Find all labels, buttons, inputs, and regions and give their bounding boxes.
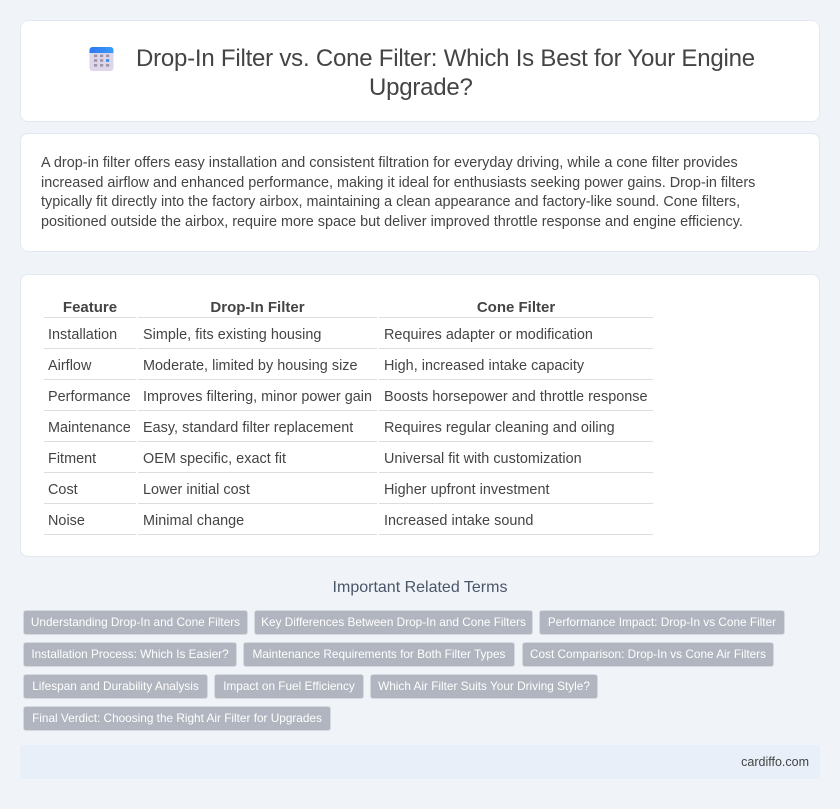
- row: maintenance: Requires regular cleaning and oiling: [384, 420, 615, 436]
- row: installation: Simple, fits existing housing: [143, 327, 321, 343]
- heading: related terms: Important Related Terms: [333, 579, 507, 596]
- tag: Final Verdict: Choosing the Right Air Filter for Upgrades: [32, 711, 322, 725]
- table header: Drop-In Filter: [210, 299, 305, 316]
- related term tags: [23, 610, 785, 731]
- tag: Key Differences Between Drop-In and Cone Filters: [261, 615, 526, 629]
- header card: [20, 20, 820, 122]
- row: performance: Improves filtering, minor power gain: [143, 389, 372, 405]
- row: installation: Installation: [48, 327, 117, 343]
- row: installation: [44, 327, 653, 349]
- table header: Cone Filter: [477, 299, 555, 316]
- footer credit: cardiffo.com: [741, 755, 809, 769]
- tag: Lifespan and Durability Analysis: [32, 679, 199, 693]
- row: noise: Noise: [48, 513, 85, 529]
- intro text: positioned outside the airbox, require more space but deliver improved throttle response and engine efficiency.: [41, 214, 743, 230]
- row: fitment: Fitment: [48, 451, 96, 467]
- tag: Cost Comparison: Drop-In vs Cone Air Filters: [530, 647, 766, 661]
- row: airflow: [44, 358, 653, 380]
- tag: [214, 674, 364, 699]
- tag: [23, 674, 208, 699]
- row: cost: Higher upfront investment: [384, 482, 550, 498]
- row: noise: [44, 513, 653, 535]
- tag: Installation Process: Which Is Easier?: [31, 647, 229, 661]
- row: fitment: OEM specific, exact fit: [143, 451, 286, 467]
- row: performance: Performance: [48, 389, 131, 405]
- row: fitment: [44, 451, 653, 473]
- comparison table: [44, 299, 653, 318]
- table header: Feature: [63, 299, 117, 316]
- tag: [243, 642, 515, 667]
- intro text: A drop-in filter offers easy installation and consistent filtration for everyday driving, while a cone filter provides: [41, 155, 738, 171]
- footer: [20, 745, 820, 779]
- tag: [254, 610, 533, 635]
- tag: [522, 642, 774, 667]
- row: performance: Boosts horsepower and throttle response: [384, 389, 648, 405]
- title: Drop-In Filter vs. Cone Filter: Which Is Best for Your Engine: [136, 45, 755, 72]
- title: [136, 45, 755, 101]
- row: airflow: High, increased intake capacity: [384, 358, 584, 374]
- row: performance: [44, 389, 653, 411]
- table header: [44, 299, 653, 318]
- tag: [370, 674, 598, 699]
- row: noise: Minimal change: [143, 513, 244, 529]
- row: airflow: Airflow: [48, 358, 91, 374]
- row: noise: Increased intake sound: [384, 513, 533, 529]
- row: fitment: Universal fit with customization: [384, 451, 582, 467]
- panel: introduction: [20, 133, 820, 252]
- row: cost: [44, 482, 653, 504]
- row: airflow: Moderate, limited by housing size: [143, 358, 358, 374]
- row: cost: Cost: [48, 482, 78, 498]
- tag: Maintenance Requirements for Both Filter Types: [253, 647, 505, 661]
- tag: Which Air Filter Suits Your Driving Style?: [378, 679, 590, 693]
- tag: Performance Impact: Drop-In vs Cone Filter: [548, 615, 776, 629]
- tag: Understanding Drop-In and Cone Filters: [31, 615, 240, 629]
- row: maintenance: [44, 420, 653, 442]
- intro text: increased airflow and enhanced performance, making it ideal for enthusiasts seeking power gains. Drop-in filters: [41, 175, 755, 191]
- row: installation: Requires adapter or modification: [384, 327, 593, 343]
- tag: [23, 706, 331, 731]
- row: maintenance: Maintenance: [48, 420, 131, 436]
- tag: [23, 610, 248, 635]
- icon: calendar: [90, 47, 114, 71]
- tag: [23, 642, 237, 667]
- title: Upgrade?: [369, 74, 473, 101]
- intro text: typically fit directly into the factory airbox, maintaining a clean appearance and factory-like sound. Cone filters,: [41, 194, 740, 210]
- intro text: [41, 155, 755, 230]
- panel: comparison table: [20, 274, 820, 557]
- row: maintenance: Easy, standard filter replacement: [143, 420, 353, 436]
- row: cost: Lower initial cost: [143, 482, 250, 498]
- tag: [539, 610, 785, 635]
- tag: Impact on Fuel Efficiency: [223, 679, 355, 693]
